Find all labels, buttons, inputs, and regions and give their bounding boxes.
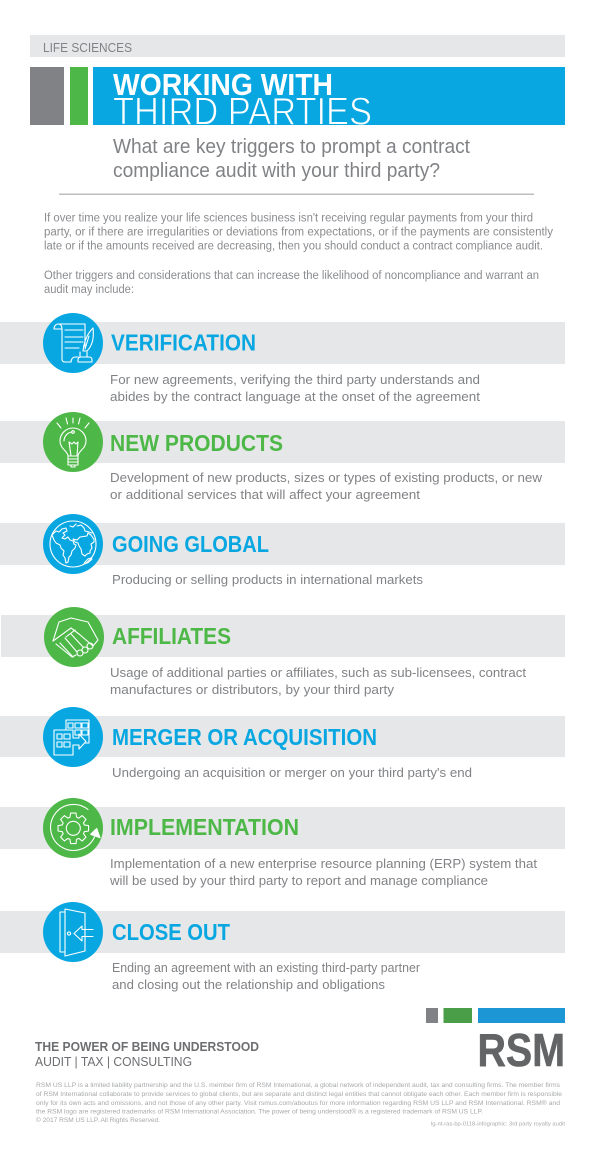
legal text: RSM US LLP is a limited liability partnership and the U.S. member firm of RSM International, a global network of independent audit, tax and consulting firms. The member firms — [36, 1082, 561, 1089]
legal text: of RSM International collaborate to provide services to global clients, but are separate and distinct legal entities that cannot obligate each other. Each member firm is responsible — [36, 1091, 562, 1098]
icon: handshake — [53, 618, 98, 657]
legal text: © 2017 RSM US LLP. All Rights Reserved. — [36, 1116, 160, 1124]
verification description: abides by the contract language at the onset of the agreement — [110, 389, 480, 404]
intro paragraph: audit may include: — [44, 284, 134, 296]
category label bar: LIFE SCIENCES — [43, 40, 132, 55]
panel: close out: CLOSE OUT — [112, 919, 230, 945]
tagline — [35, 1040, 259, 1069]
RSM logo: RSM — [478, 1024, 565, 1076]
tagline: AUDIT | TAX | CONSULTING — [35, 1055, 192, 1069]
subheading question — [113, 136, 470, 182]
going global description: Producing or selling products in international markets — [112, 572, 423, 587]
icon: door with exit arrow — [60, 909, 93, 956]
close out description: and closing out the relationship and obligations — [112, 977, 385, 992]
intro paragraph — [44, 212, 553, 296]
panel: merger or acquisition: MERGER OR ACQUISITION — [112, 724, 377, 750]
title banner — [30, 67, 565, 125]
close out description: Ending an agreement with an existing third-party partner — [112, 960, 421, 975]
intro paragraph: party, or if there are irregularities or deviations from expectations, or if the payments are consistently — [44, 226, 553, 238]
intro paragraph: Other triggers and considerations that can increase the likelihood of noncompliance and warrant an — [44, 270, 539, 282]
panel: going global — [0, 514, 565, 587]
new products description: or additional services that will affect your agreement — [110, 487, 420, 502]
implementation description: Implementation of a new enterprise resource planning (ERP) system that — [110, 856, 537, 871]
panel: merger or acquisition — [0, 707, 565, 780]
panel: new products: NEW PRODUCTS — [110, 430, 283, 456]
legal text — [36, 1082, 562, 1124]
icon: globe — [50, 521, 96, 567]
implementation description — [109, 856, 537, 888]
panel: close out — [0, 902, 565, 992]
verification description — [110, 372, 480, 404]
affiliates description: manufactures or distributors, by your third party — [110, 682, 395, 697]
intro paragraph: If over time you realize your life sciences business isn't receiving regular payments from your third — [44, 212, 533, 224]
close out description — [112, 960, 421, 992]
subheading question: compliance audit with your third party? — [113, 160, 440, 182]
panel: implementation: IMPLEMENTATION — [110, 814, 299, 840]
tagline: THE POWER OF BEING UNDERSTOOD — [35, 1040, 259, 1054]
icon: gear with circular arrow — [51, 804, 100, 850]
subheading question: What are key triggers to prompt a contract — [113, 136, 470, 158]
icon: buildings and arrow — [54, 720, 89, 755]
legal text: the RSM logo are registered trademarks of RSM International Association. The power of being understood® is a registered trademark of RSM US LLP. — [36, 1108, 483, 1116]
footer colour blocks — [426, 1008, 565, 1023]
icon: scroll and quill — [54, 324, 93, 362]
title banner: THIRD PARTIES — [113, 90, 372, 134]
implementation description: will be used by your third party to report and manage compliance — [109, 873, 488, 888]
panel: affiliates: AFFILIATES — [112, 623, 231, 649]
panel: implementation — [0, 798, 565, 888]
panel: going global: GOING GLOBAL — [112, 531, 269, 557]
verification description: For new agreements, verifying the third party understands and — [110, 372, 480, 387]
new products description: Development of new products, sizes or types of existing products, or new — [110, 470, 543, 485]
category label bar — [30, 35, 565, 57]
new products description — [110, 470, 543, 502]
panel: verification: VERIFICATION — [111, 330, 256, 356]
affiliates description — [110, 665, 526, 697]
panel: new products — [0, 412, 565, 502]
affiliates description: Usage of additional parties or affiliates, such as sub-licensees, contract — [110, 665, 526, 680]
legal text: only for its own acts and omissions, and not those of any other party. Visit rsmus.com/aboutus for more information regarding RSM US LLP and RSM International. RSM® and — [36, 1099, 560, 1107]
icon: light bulb — [57, 418, 89, 467]
merger description: Undergoing an acquisition or merger on your third party's end — [112, 765, 472, 780]
panel: verification — [0, 313, 565, 404]
title banner: WORKING WITH — [113, 67, 333, 102]
document code: lg-nt-ras-bp-0118-infographic: 3rd party royalty audit — [431, 1122, 565, 1128]
intro paragraph: late or if the amounts received are decreasing, then you should conduct a contract compliance audit. — [44, 240, 543, 252]
panel: affiliates — [1, 607, 565, 697]
